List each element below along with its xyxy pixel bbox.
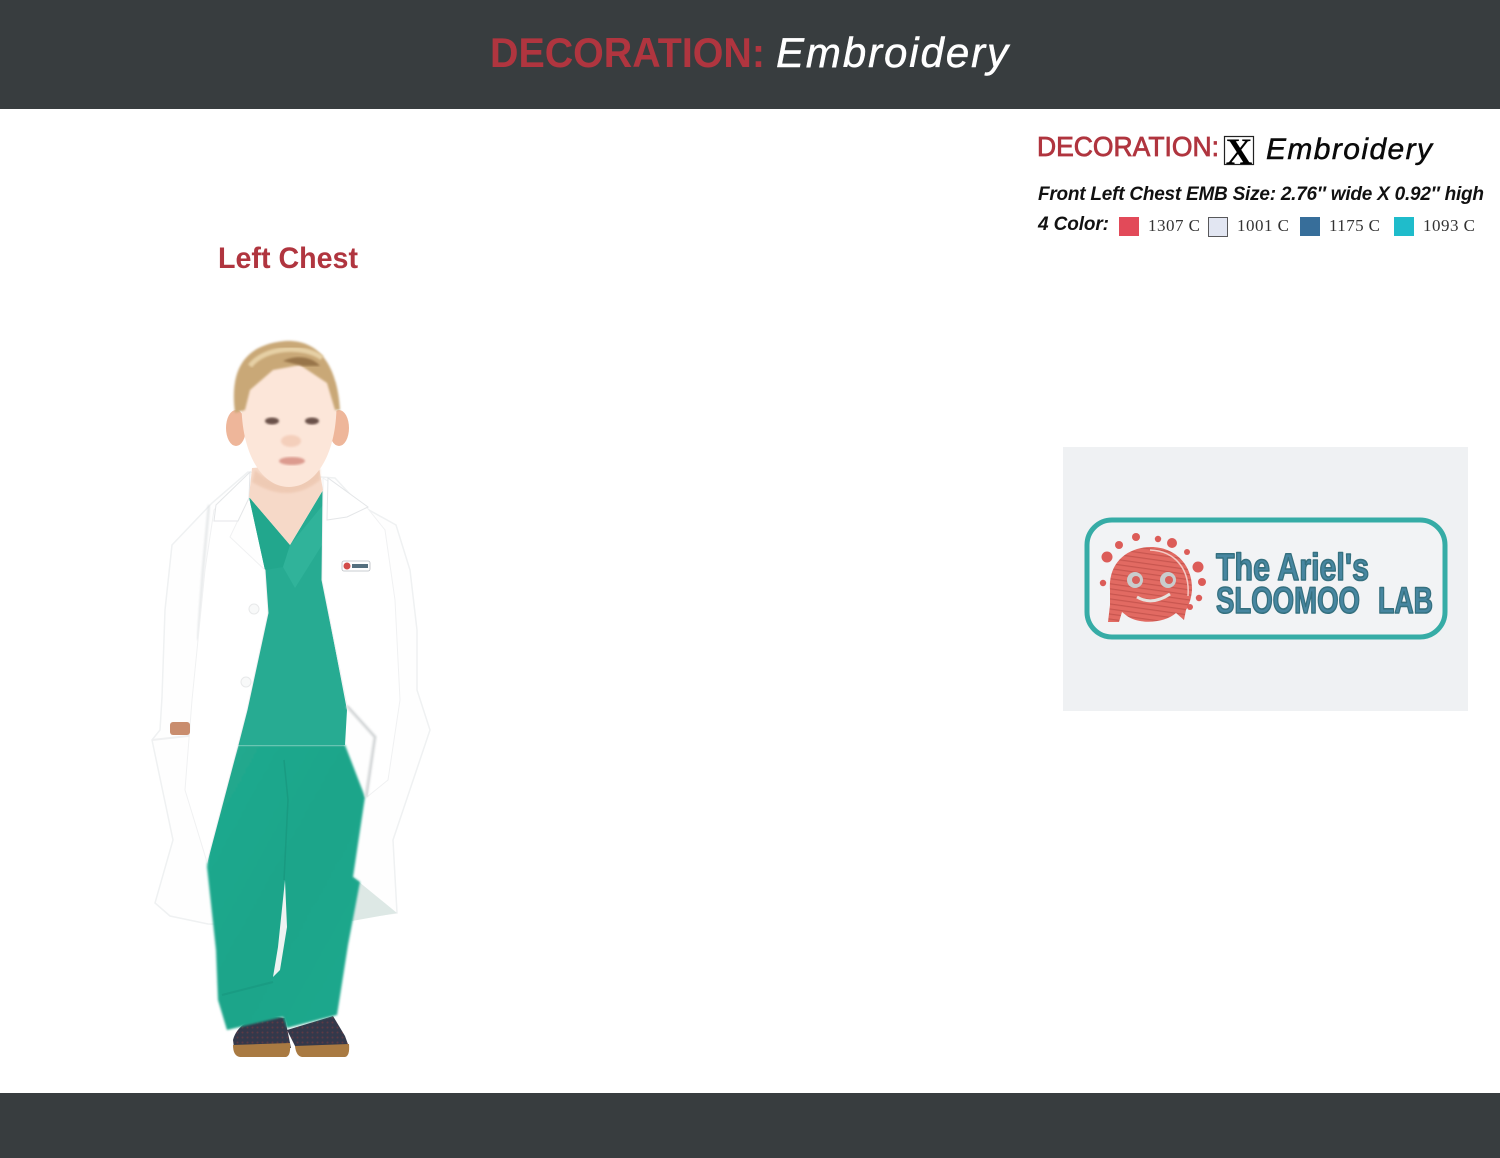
logo text [1216,547,1433,621]
face [241,364,337,487]
chest emblem [342,561,370,571]
child in lab coat and scrubs [152,341,430,1057]
footer bar [0,1093,1500,1158]
colour legend: 1093 C [1423,216,1475,235]
scrub trousers [207,745,365,1030]
heading: Left Chest: Left Chest [218,242,358,275]
colour legend [1037,214,1475,236]
logo mascot [1100,533,1206,622]
buttons [241,604,259,687]
embroidery logo panel [1063,447,1468,711]
coat fronts [185,472,400,862]
patch border [1087,520,1445,637]
coat shadow edge [347,706,375,797]
logo text: The Ariel's [1216,547,1369,589]
logo text: LAB [1378,580,1433,621]
scrub top [238,490,347,745]
mouth [279,457,305,465]
collar [214,472,368,521]
ears [226,410,246,446]
header bar [0,0,1500,109]
title [490,29,1011,76]
shoes [233,1016,349,1057]
gap between the legs [273,880,287,977]
decoration line [1037,131,1434,173]
spec block [1037,131,1484,236]
hand [170,722,190,735]
decoration line: DECORATION: [1037,131,1219,162]
colour legend: 1307 C [1148,216,1200,235]
colour legend: 4 Color: [1037,214,1109,235]
neck [249,462,323,545]
size line: Front Left Chest EMB Size: 2.76″ wide X 0.92″ high [1038,184,1484,205]
hair [234,341,340,413]
title: Embroidery [776,29,1011,76]
decoration line: X [1226,132,1253,173]
colour legend: 1175 C [1329,216,1380,235]
decoration line: Embroidery [1266,133,1434,166]
logo text: SLOOMOO [1216,580,1360,621]
eyes [265,418,319,424]
colour legend: 1001 C [1237,216,1289,235]
lab coat back and body [152,472,430,925]
title: DECORATION: [490,29,765,76]
nose [281,435,301,447]
